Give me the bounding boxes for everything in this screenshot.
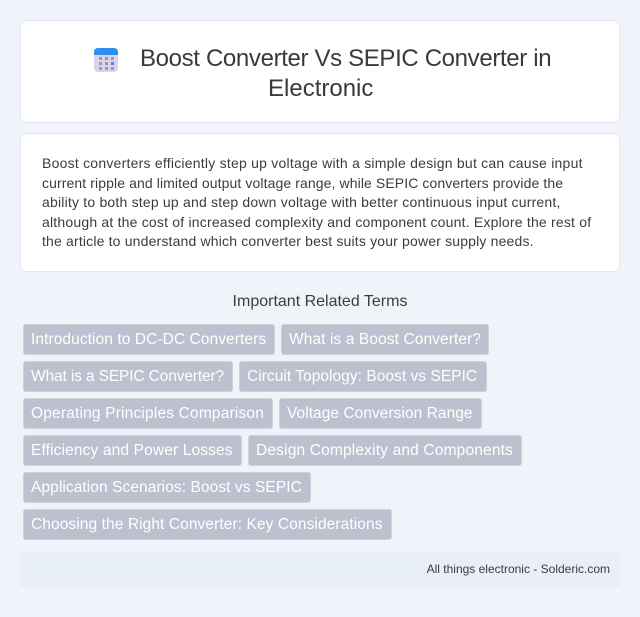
tag: applications bbox=[23, 472, 311, 503]
tag: boost bbox=[281, 324, 489, 355]
icon: calendar bbox=[94, 48, 118, 72]
tag: efficiency: Efficiency and Power Losses bbox=[31, 442, 233, 459]
tag: sepic: What is a SEPIC Converter? bbox=[31, 368, 224, 385]
tag: operating principles: Operating Principles Comparison bbox=[31, 405, 264, 422]
tag: operating principles bbox=[23, 398, 273, 429]
tag: choosing bbox=[23, 509, 392, 540]
title: Electronic bbox=[268, 75, 373, 102]
title: Boost Converter Vs SEPIC Converter in bbox=[140, 45, 551, 72]
intro text: current ripple and limited output voltage range, while SEPIC converters provide the bbox=[42, 175, 563, 191]
intro text bbox=[42, 155, 592, 249]
tag: voltage range: Voltage Conversion Range bbox=[287, 405, 473, 422]
intro text: ability to both step up and step down voltage with better continuous input current, bbox=[42, 194, 561, 210]
intro text: although at the cost of increased complexity and component count. Explore the rest of bbox=[42, 214, 591, 230]
tag: topology bbox=[239, 361, 487, 392]
tag: choosing: Choosing the Right Converter: Key Considerations bbox=[31, 516, 383, 533]
tag: applications: Application Scenarios: Boost vs SEPIC bbox=[31, 479, 302, 496]
tag: introduction: Introduction to DC-DC Converters bbox=[31, 331, 266, 348]
header panel bbox=[20, 20, 620, 123]
intro text panel bbox=[20, 133, 620, 272]
tag: voltage range bbox=[279, 398, 482, 429]
footer text: All things electronic - Solderic.com bbox=[427, 562, 610, 576]
tag: design complexity: Design Complexity and Components bbox=[256, 442, 513, 459]
tag: boost: What is a Boost Converter? bbox=[289, 331, 481, 348]
tag: efficiency bbox=[23, 435, 242, 466]
related terms heading: Important Related Terms bbox=[233, 293, 407, 310]
intro text: the article to understand which converter best suits your power supply needs. bbox=[42, 233, 534, 249]
tag: sepic bbox=[23, 361, 233, 392]
tag: introduction bbox=[23, 324, 275, 355]
title bbox=[140, 45, 551, 102]
related terms tags bbox=[23, 324, 522, 540]
intro text: Boost converters efficiently step up voltage with a simple design but can cause input bbox=[42, 155, 583, 171]
tag: topology: Circuit Topology: Boost vs SEPIC bbox=[247, 368, 477, 385]
footer bar bbox=[20, 553, 620, 587]
tag: design complexity bbox=[248, 435, 522, 466]
